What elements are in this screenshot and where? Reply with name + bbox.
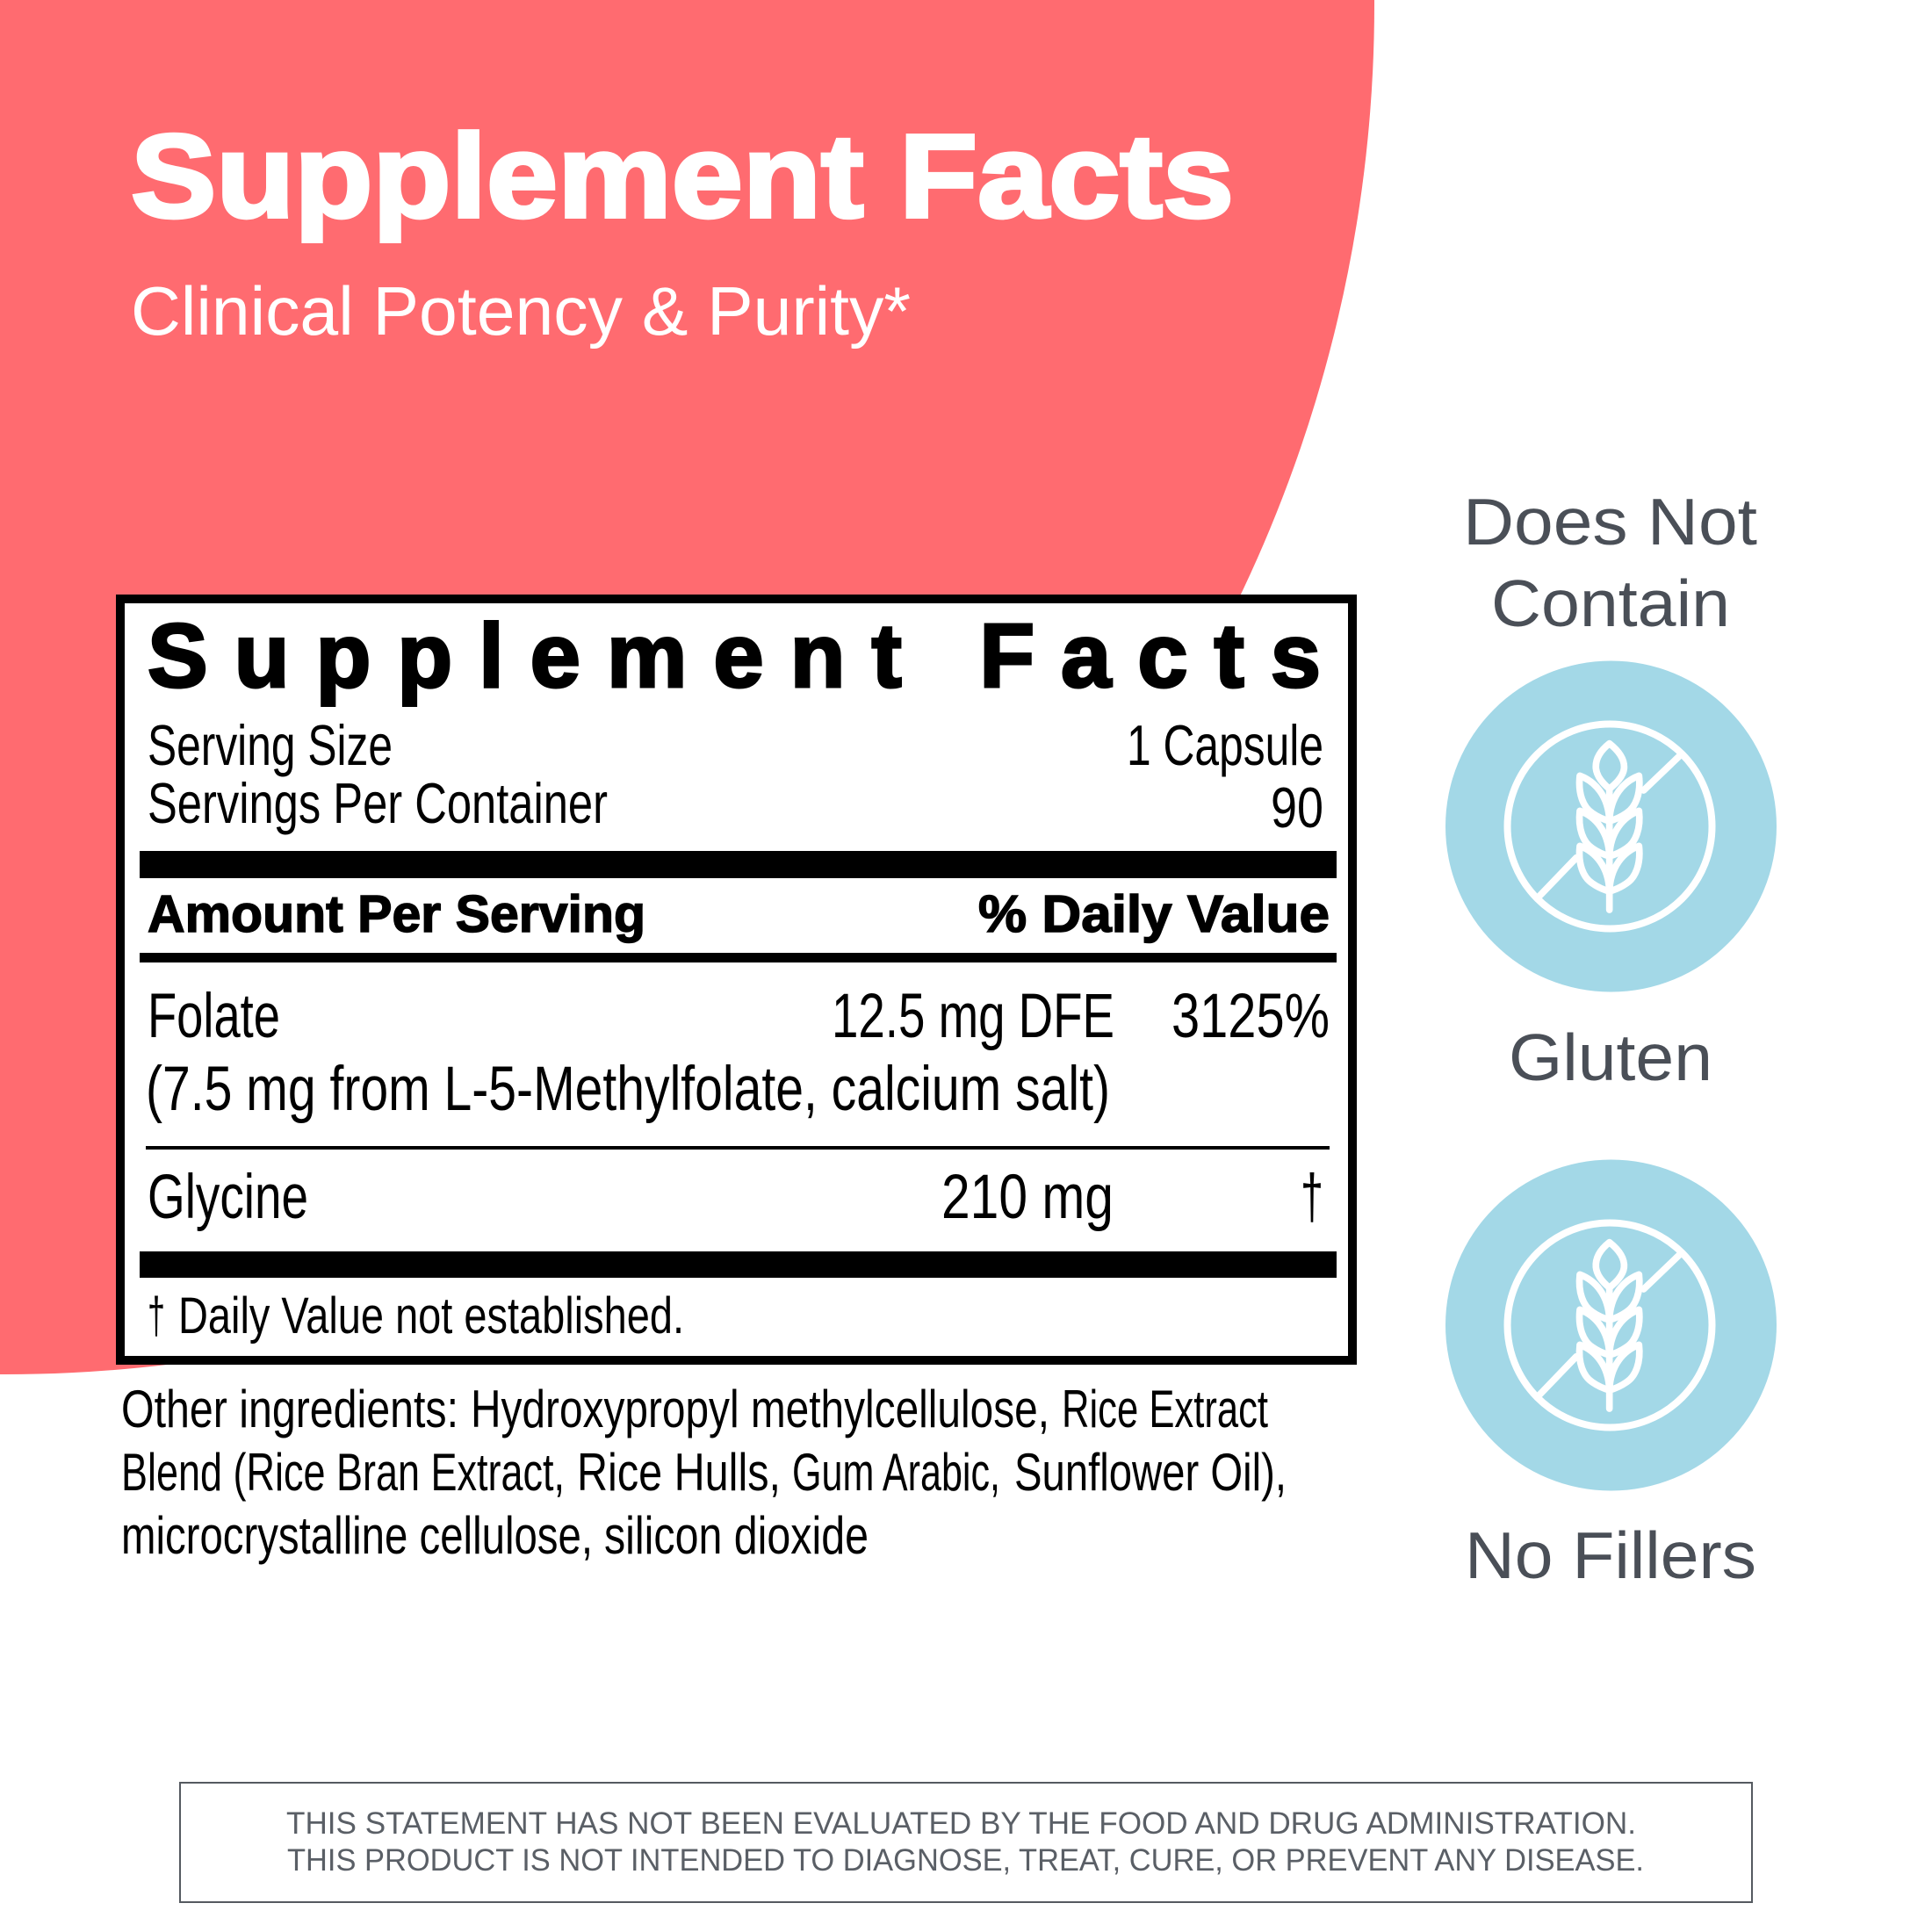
background: coral quarter circle [0, 0, 1374, 1374]
disclaimer box: THIS STATEMENT HAS NOT BEEN EVALUATED BY THE FOOD AND DRUG ADMINISTRATION. [286, 1806, 1636, 1841]
serving size row: Serving Size [148, 713, 393, 777]
other ingredients: Other ingredients: [121, 1380, 458, 1438]
folate row: Folate [148, 982, 280, 1051]
other ingredients: silicon dioxide [604, 1506, 869, 1565]
title: Supplement Facts [131, 110, 1234, 242]
gluten label: Gluten [1509, 1020, 1712, 1094]
footnote: † [148, 1287, 165, 1344]
folate row [146, 982, 1330, 1124]
icon: gluten free [1445, 660, 1777, 992]
other ingredients [121, 1380, 1287, 1565]
subtitle: Clinical Potency & Purity* [131, 272, 911, 350]
other ingredients: Sunflower Oil), [1014, 1443, 1287, 1502]
other ingredients: Rice Extract [1062, 1380, 1268, 1438]
other ingredients: Blend (Rice Bran Extract, [121, 1443, 565, 1502]
no fillers label: No Fillers [1465, 1518, 1756, 1592]
column headers: % Daily Value [978, 885, 1330, 943]
servings per container row [148, 771, 1323, 840]
thick divider bottom [140, 1251, 1337, 1278]
glycine row: Glycine [148, 1163, 308, 1232]
footnote: Daily Value not established. [178, 1287, 684, 1344]
servings per container row: Servings Per Container [148, 771, 608, 835]
other ingredients: microcrystalline cellulose, [121, 1506, 593, 1565]
serving size row [148, 713, 1323, 777]
glycine row: 210 mg [941, 1163, 1114, 1232]
glycine row: † [1301, 1163, 1323, 1232]
disclaimer box: THIS PRODUCT IS NOT INTENDED TO DIAGNOSE, TREAT, CURE, OR PREVENT ANY DISEASE. [287, 1843, 1644, 1878]
glycine row [148, 1163, 1323, 1232]
folate row: 3125% [1171, 982, 1330, 1051]
does not contain heading: Does Not [1463, 485, 1757, 559]
servings per container row: 90 [1271, 775, 1323, 840]
medium divider [140, 953, 1337, 962]
disclaimer box [180, 1783, 1752, 1902]
table heading: Supplement Facts [148, 605, 1321, 706]
panel: supplement facts table [120, 599, 1352, 1360]
does not contain heading [1463, 485, 1757, 640]
folate row: (7.5 mg from L-5-Methylfolate, calcium salt) [146, 1055, 1110, 1124]
serving size row: 1 Capsule [1127, 713, 1323, 777]
thick divider top [140, 851, 1337, 878]
does not contain heading: Contain [1491, 566, 1730, 640]
other ingredients: Gum Arabic, [792, 1443, 1000, 1502]
folate row: 12.5 mg DFE [832, 982, 1114, 1051]
other ingredients: Rice Hulls, [577, 1443, 781, 1502]
table frame [120, 599, 1352, 1360]
column headers [148, 885, 1330, 943]
icon: no fillers [1445, 1159, 1777, 1491]
other ingredients: Hydroxypropyl methylcellulose, [471, 1380, 1049, 1438]
column headers: Amount Per Serving [148, 885, 645, 943]
